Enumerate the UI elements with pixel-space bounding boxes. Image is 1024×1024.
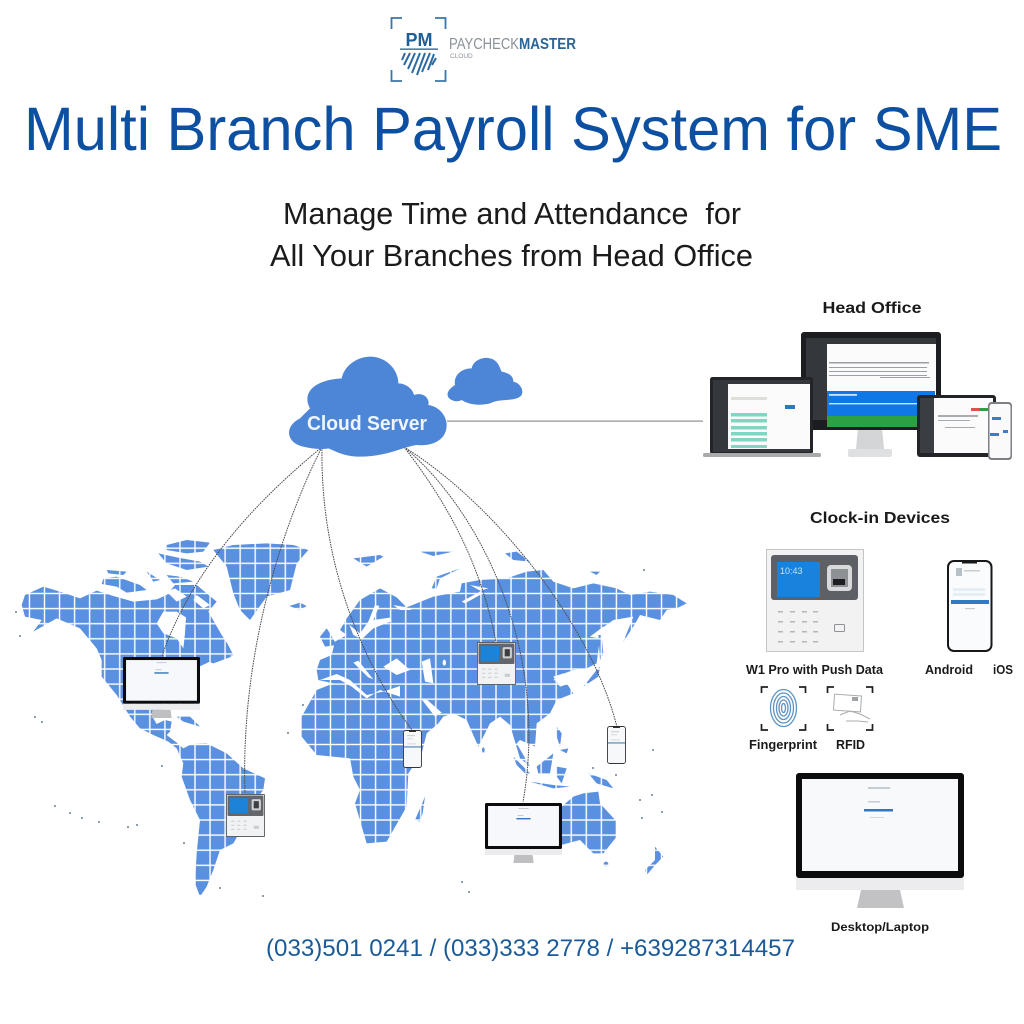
eurasia and africa — [302, 552, 687, 875]
heading: clock-in devices: Clock-in Devices — [810, 510, 950, 527]
label: RFID: RFID — [836, 738, 865, 752]
label: Desktop/Laptop: Desktop/Laptop — [831, 922, 929, 934]
small cloud — [448, 358, 522, 405]
logo: PayCheckMaster Cloud: PM — [406, 30, 432, 50]
laptop — [703, 377, 821, 457]
title: Multi Branch Payroll System for SME — [24, 95, 1002, 163]
logo: PayCheckMaster Cloud: CLOUD — [450, 53, 473, 60]
north america and south america — [22, 540, 308, 897]
subtitle: All Your Branches from Head Office — [270, 238, 753, 273]
label: Fingerprint: Fingerprint — [749, 738, 818, 752]
icon: RFID card — [828, 687, 872, 730]
logo: PayCheckMaster Cloud: MASTER — [519, 36, 576, 53]
icon: fingerprint — [762, 687, 806, 730]
label: iOS: iOS — [993, 663, 1013, 677]
cloud server: Cloud Server — [307, 413, 427, 435]
map pin: phone africa — [404, 731, 422, 767]
label: Android: Android — [925, 663, 973, 677]
connection lines from cloud to branches — [162, 447, 617, 802]
head office devices — [703, 332, 1012, 460]
subtitle — [270, 196, 753, 273]
map pin: monitor north america — [123, 657, 200, 718]
logo: PayCheckMaster Cloud — [392, 18, 576, 81]
map pin: clock device asia — [477, 642, 516, 685]
desktop/laptop monitor — [796, 773, 964, 908]
smartphone — [948, 561, 992, 651]
tablet — [917, 395, 996, 457]
heading: head office: Head Office — [822, 300, 922, 317]
line from cloud to head office — [447, 420, 703, 422]
cloud server — [289, 357, 447, 457]
map pin: phone pacific — [608, 727, 626, 763]
contact phone numbers: (033)501 0241 / (033)333 2778 / +639287314457 — [266, 935, 795, 962]
map speckle islands — [15, 569, 663, 897]
biometric clock device W1 Pro: 10:43 — [780, 566, 803, 576]
logo: PayCheckMaster Cloud: PAYCHECK — [449, 36, 520, 53]
map grid — [0, 530, 700, 905]
world map — [0, 530, 700, 905]
phone — [988, 402, 1012, 460]
desktop monitor — [801, 332, 941, 457]
subtitle: Manage Time and Attendance for — [283, 196, 741, 231]
biometric clock device W1 Pro — [766, 550, 864, 652]
map pin: monitor australia — [485, 803, 562, 863]
label: W1 Pro with Push Data: W1 Pro with Push Data — [746, 663, 884, 677]
map pin: clock device south america — [226, 794, 265, 837]
